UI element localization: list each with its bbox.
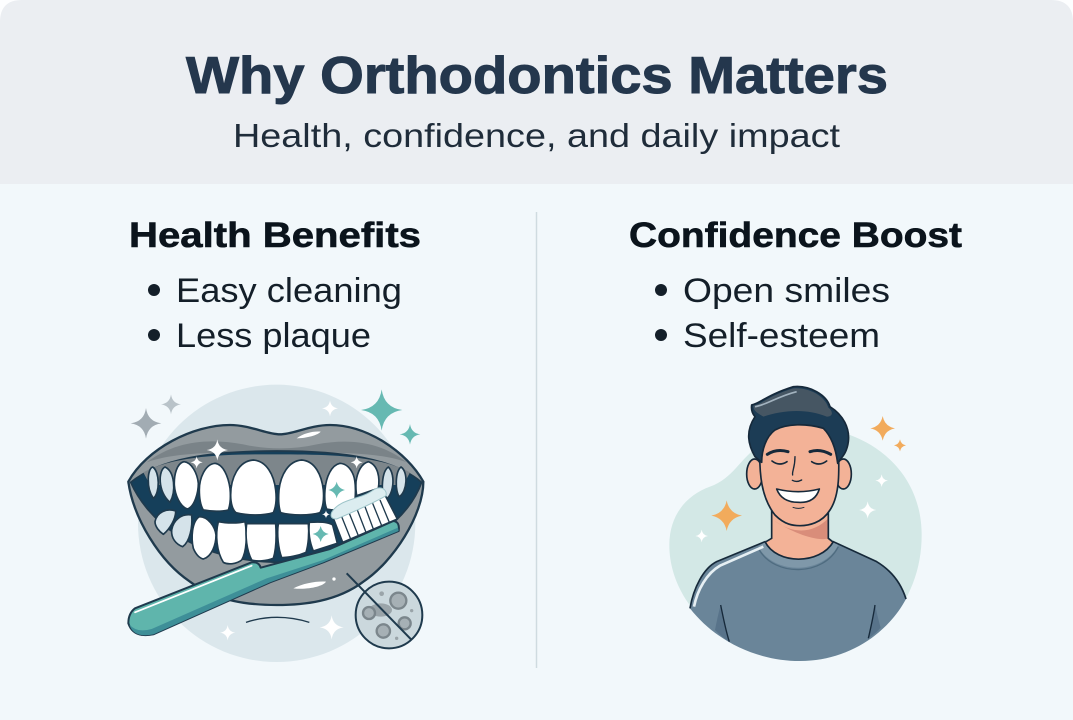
sparkles around the mouth [131, 389, 420, 640]
bristles [333, 495, 397, 542]
brush handle [128, 521, 399, 635]
icon: crossed-out plaque [347, 573, 422, 648]
mint blob [669, 435, 922, 661]
bullet list: health benefits [148, 272, 402, 355]
upper lip shade [147, 441, 407, 462]
smile [777, 489, 819, 502]
bullet list: confidence boost [655, 272, 890, 355]
chin line [246, 617, 309, 622]
panel: confidence boost [629, 216, 962, 661]
hair [749, 386, 849, 463]
gums [143, 454, 410, 485]
subtitle: Health, confidence, and daily impact [233, 117, 840, 154]
shoulder outlines [690, 542, 906, 608]
ears [747, 459, 851, 489]
mouth interior [131, 451, 422, 562]
bullet list: confidence boost: Open smiles [683, 272, 890, 310]
lower teeth [155, 510, 337, 564]
heading: health benefits: Health Benefits [129, 216, 421, 255]
bullet list: health benefits: Easy cleaning [176, 272, 402, 310]
toothbrush [128, 488, 399, 635]
closed eyes [772, 461, 827, 464]
upper teeth [148, 460, 406, 515]
orange and white sparkles [695, 416, 906, 542]
header band [0, 0, 1073, 184]
heading: confidence boost: Confidence Boost [629, 216, 962, 255]
panel: health benefits [128, 216, 423, 662]
nose [792, 457, 802, 481]
neck [764, 507, 833, 561]
small star on tooth [322, 510, 330, 518]
shirt [690, 542, 906, 661]
lips [128, 425, 423, 605]
bullet list: health benefits: Less plaque [176, 317, 371, 355]
illustration: smiling man [669, 386, 922, 661]
toothpaste [331, 488, 386, 519]
tooth sparkles [191, 439, 363, 542]
title: Why Orthodontics Matters [186, 47, 888, 105]
bullet list: confidence boost: Self-esteem [683, 317, 880, 355]
lip highlights [293, 432, 336, 589]
illustration: teeth and toothbrush [128, 385, 423, 662]
face [760, 419, 839, 526]
eyebrows [767, 450, 831, 454]
lower lip line [793, 507, 804, 508]
